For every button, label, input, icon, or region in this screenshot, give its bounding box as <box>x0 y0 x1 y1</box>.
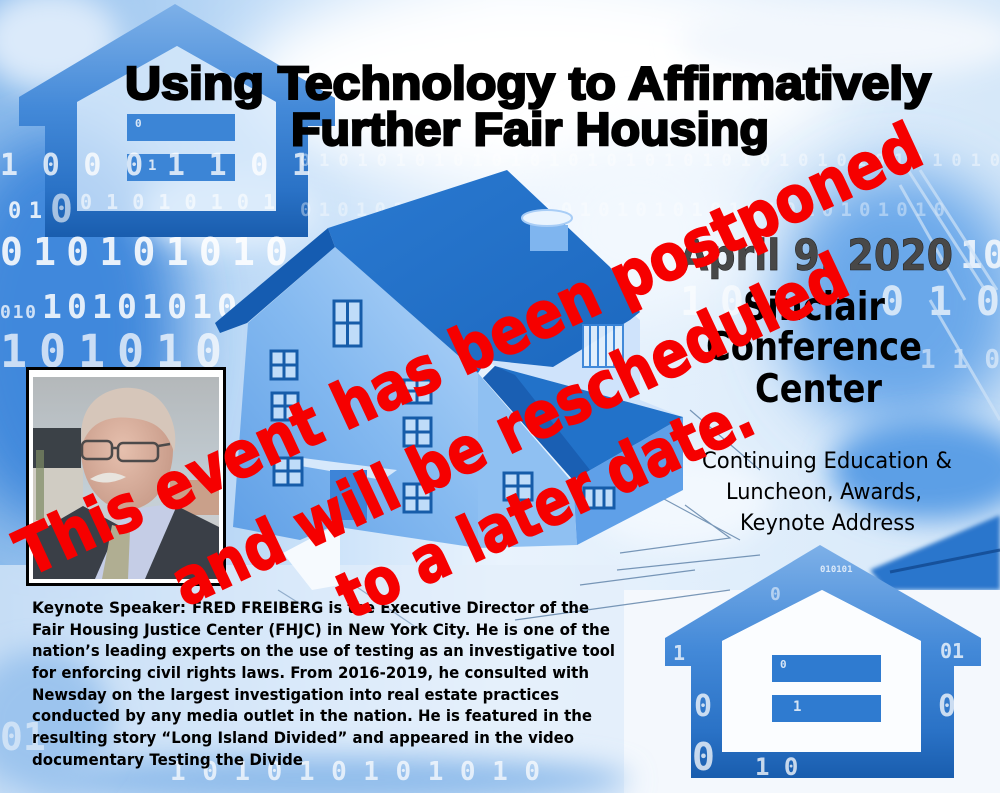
keynote biography text: FRED FREIBERG is the Executive Director of the <box>192 598 589 617</box>
binary digits background: 01010101 <box>80 190 275 214</box>
main roof <box>328 170 640 373</box>
binary digits background: 010101010 <box>0 230 288 274</box>
icon: equal housing logo bottom right: 01 <box>940 639 964 663</box>
event description <box>702 449 952 536</box>
icon: equal housing logo top left: 0 <box>135 117 142 130</box>
title <box>125 57 931 155</box>
icon: equal housing logo bottom right: 1 <box>673 641 685 665</box>
event date: April 9, 2020 <box>679 231 953 281</box>
wing roof <box>483 366 683 480</box>
icon: equal housing logo bottom right: 0 <box>938 689 956 724</box>
binary digits background: 101010 <box>0 325 222 378</box>
venue: Conference <box>706 325 922 370</box>
venue: Center <box>755 367 883 412</box>
icon: equal housing logo bottom right: 010101 <box>820 565 853 575</box>
panel: bottom left text backing <box>0 565 630 793</box>
keynote biography text <box>32 598 615 769</box>
event description: Luncheon, Awards, <box>726 480 922 505</box>
left eave <box>215 228 335 333</box>
keynote biography text: resulting story “Long Island Divided” and appeared in the video <box>32 728 574 747</box>
binary digits background: 0 <box>50 187 73 231</box>
porch <box>283 457 397 520</box>
chimney <box>522 210 572 251</box>
binary digits background: 010 <box>880 279 1000 325</box>
icon: equal housing logo top left <box>19 4 335 237</box>
event description: Continuing Education & <box>702 449 952 474</box>
icon: equal housing logo bottom right: 1 0 <box>755 753 798 781</box>
icon: equal housing logo bottom right: 0 <box>692 735 715 779</box>
binary digits background: 10 <box>680 279 744 325</box>
binary digits background: 01 <box>0 715 46 759</box>
icon: equal housing logo bottom right <box>665 545 981 781</box>
banknote lines <box>900 170 1000 420</box>
wing front wall <box>478 373 577 548</box>
main wall <box>233 247 478 548</box>
keynote biography text: Fair Housing Justice Center (FHJC) in New York City. He is one of the <box>32 620 610 639</box>
keynote biography text: Keynote Speaker: <box>32 598 186 617</box>
wing side wall <box>573 417 683 545</box>
binary digits background: 0101010101010101010101010101010101010 <box>300 151 1000 171</box>
venue: Sinclair <box>743 285 886 330</box>
keynote biography text: nation’s leading experts on the use of testing as an investigative tool <box>32 641 615 660</box>
postponement notice: and will be rescheduled <box>160 240 860 621</box>
balcony <box>583 325 623 367</box>
binary digits background: 01010101010101010101010101010101010 <box>300 199 945 221</box>
title: Further Fair Housing <box>291 103 769 155</box>
postponement notice: to a later date. <box>326 379 765 635</box>
keynote biography text: for enforcing civil rights laws. From 2016-2019, he consulted with <box>32 663 589 682</box>
icon: equal housing logo top left: 1 <box>148 158 156 174</box>
blueprint lines <box>278 410 1000 630</box>
white paper under house <box>283 523 340 590</box>
venue <box>706 285 922 412</box>
icon: equal housing logo bottom right: 0 <box>770 584 781 605</box>
panel: bottom right white area <box>624 590 1000 793</box>
keynote biography text: Newsday on the largest investigation into real estate practices <box>32 685 559 704</box>
icon: equal housing logo bottom right: 0 <box>780 658 787 671</box>
photo: keynote speaker <box>26 367 226 586</box>
binary digits background: 10001101 <box>0 148 310 183</box>
windows <box>271 301 614 512</box>
binary digits background: 110 <box>920 345 1000 375</box>
icon: equal housing logo bottom right: 0 <box>694 689 712 724</box>
keynote biography text: documentary Testing the Divide <box>32 750 303 769</box>
icon: equal housing logo bottom right: 1 <box>793 699 801 715</box>
keynote biography text: conducted by any media outlet in the nation. He is featured in the <box>32 706 592 725</box>
binary digits background: 01 <box>8 199 42 224</box>
binary digits background: 010 <box>0 302 36 323</box>
binary digits background: 10101010 <box>42 287 237 326</box>
upper right wall <box>487 280 683 417</box>
illustration: blue house <box>215 170 683 590</box>
binary digits background: 101010101010 <box>170 757 540 787</box>
event description: Keynote Address <box>740 511 915 536</box>
title: Using Technology to Affirmatively <box>125 57 931 109</box>
